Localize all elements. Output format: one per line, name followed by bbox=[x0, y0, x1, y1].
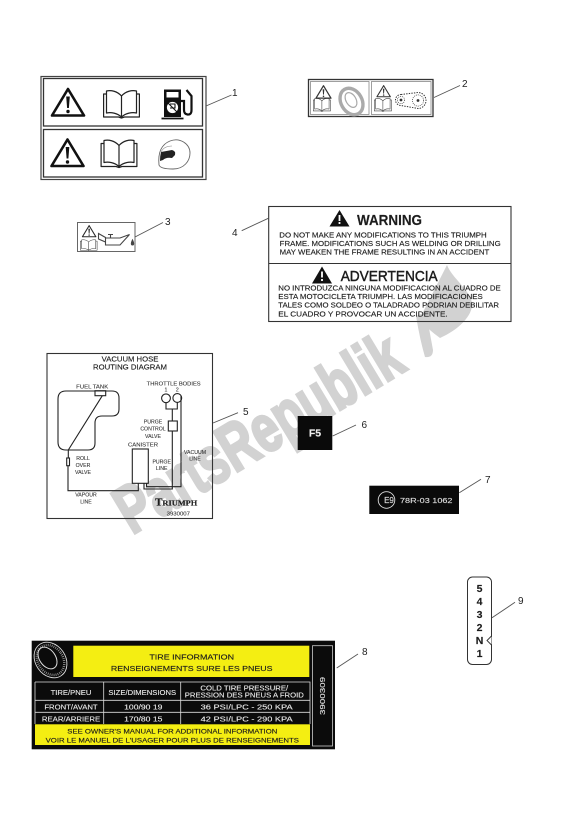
yellow title panel bbox=[73, 646, 309, 677]
diagram labels: CANISTER bbox=[128, 443, 158, 449]
callout 3: 3 bbox=[165, 217, 171, 228]
icon: warning triangle bbox=[377, 86, 390, 97]
advertencia text bbox=[278, 284, 501, 319]
tire pressure table: 170/80 15 bbox=[124, 717, 163, 724]
icon: book top bbox=[104, 91, 139, 118]
icon: warning triangle bottom bbox=[52, 140, 84, 166]
label 1: warning icons panel bbox=[41, 76, 206, 180]
yellow footer panel bbox=[35, 724, 310, 745]
label 9: gear indicator: 1 bbox=[477, 648, 483, 660]
icon: chain and sprockets bbox=[396, 92, 426, 108]
diagram title: ROUTING DIAGRAM bbox=[93, 363, 167, 372]
icon: oil can bbox=[98, 234, 134, 245]
label 8: tire information bbox=[27, 636, 335, 749]
label 7: E9 approval: E9 bbox=[384, 496, 394, 505]
callout 3 bbox=[135, 217, 171, 237]
icon: tire bbox=[335, 84, 368, 119]
tire pressure table: FRONT/AVANT bbox=[44, 704, 98, 711]
icon: book bbox=[80, 240, 97, 251]
warning text bbox=[279, 230, 501, 256]
callout 1: 1 bbox=[232, 88, 238, 99]
icon: warning triangle bbox=[330, 210, 350, 226]
callout 5: 5 bbox=[243, 407, 249, 418]
advertencia text: NO INTRODUZCA NINGUNA MODIFICACION AL CUADRO DE bbox=[278, 284, 501, 293]
part number panel: 3900309 bbox=[318, 677, 327, 715]
diagram labels bbox=[75, 382, 206, 506]
warning text: FRAME. MODIFICATIONS SUCH AS WELDING OR DRILLING bbox=[280, 239, 501, 248]
diagram labels: VALVE bbox=[75, 470, 92, 476]
callout 4: 4 bbox=[232, 228, 238, 239]
icon: book bbox=[313, 98, 330, 111]
diagram labels: VACUUM bbox=[184, 450, 206, 456]
diagram labels: 2 bbox=[176, 388, 179, 394]
icon: warning triangle bbox=[82, 226, 96, 237]
tire pressure table: REAR/ARRIERE bbox=[42, 717, 101, 724]
icon: tire bbox=[27, 636, 74, 684]
callout 9 bbox=[492, 596, 524, 618]
diagram labels: VAPOUR bbox=[75, 493, 97, 499]
warning text: MAY WEAKEN THE FRAME RESULTING IN AN ACCIDENT bbox=[280, 247, 490, 256]
label 7: E9 approval: 78R-03 1062 bbox=[400, 496, 452, 505]
icon: book bottom bbox=[101, 140, 137, 168]
tire pressure table: 36 PSI/LPC - 250 KPA bbox=[201, 704, 293, 711]
tire pressure table: COLD TIRE PRESSURE/ bbox=[200, 685, 288, 692]
diagram labels: PURGE bbox=[152, 459, 171, 465]
diagram labels: VALVE bbox=[145, 434, 162, 440]
tire pressure table: 42 PSI/LPC - 290 KPA bbox=[201, 717, 293, 724]
callout 9: 9 bbox=[518, 596, 524, 607]
advertencia text: TALES COMO SOLDEO O TALADRADO PODRIAN DEBILITAR bbox=[278, 300, 500, 309]
diagram title bbox=[93, 355, 167, 372]
icon: warning triangle top bbox=[52, 89, 84, 116]
tire pressure table bbox=[35, 682, 310, 724]
label 9: gear indicator bbox=[468, 577, 492, 664]
diagram labels: LINE bbox=[156, 466, 168, 472]
logo: triumph: TRIUMPH bbox=[155, 498, 197, 509]
icon: helmet bbox=[159, 140, 190, 169]
callout 2: 2 bbox=[462, 79, 468, 90]
yellow footer panel: VOIR LE MANUEL DE L'USAGER POUR PLUS DE RENSEIGNEMENTS bbox=[46, 737, 299, 744]
diagram labels: LINE bbox=[189, 456, 201, 462]
label 5: vacuum hose routing diagram bbox=[47, 354, 212, 518]
callout 6: 6 bbox=[362, 420, 368, 431]
callout 7 bbox=[459, 475, 491, 493]
part number panel bbox=[312, 646, 332, 746]
callout 1 bbox=[206, 88, 238, 106]
callout 5 bbox=[213, 407, 249, 423]
diagram labels: CONTROL bbox=[140, 426, 166, 432]
icon: warning triangle bbox=[316, 86, 331, 98]
advertencia text: ESTA MOTOCICLETA TRIUMPH. LAS MODIFICACIONES bbox=[278, 292, 483, 301]
callout 8 bbox=[337, 647, 368, 668]
tire pressure table: PRESSION DES PNEUS A FROID bbox=[185, 693, 304, 700]
icon: neutral marker bbox=[487, 636, 492, 645]
callout 7: 7 bbox=[485, 475, 491, 486]
tire pressure table: SIZE/DIMENSIONS bbox=[108, 690, 177, 697]
diagram labels: THROTTLE BODIES bbox=[147, 382, 201, 388]
label 9: gear indicator: 2 bbox=[477, 622, 483, 634]
label 9: gear indicator: 3 bbox=[477, 609, 483, 621]
label 7: E9 approval bbox=[369, 486, 459, 514]
diagram labels: FUEL TANK bbox=[76, 384, 109, 390]
diagram labels: LINE bbox=[80, 500, 92, 506]
diagram labels: 1 bbox=[165, 388, 168, 394]
tire pressure table: TIRE/PNEU bbox=[51, 690, 91, 697]
tire pressure table: 100/90 19 bbox=[124, 704, 163, 711]
label 6: F5 bbox=[298, 416, 332, 450]
diagram labels: OVER bbox=[76, 463, 91, 469]
label 6: F5: F5 bbox=[309, 428, 321, 440]
icon: fuel pump bbox=[162, 90, 192, 118]
heading: warning: WARNING bbox=[357, 213, 422, 229]
label 3: oil icons bbox=[78, 222, 135, 252]
yellow title panel: TIRE INFORMATION bbox=[149, 652, 234, 661]
part number: 3930007 bbox=[167, 512, 190, 518]
heading: advertencia: ADVERTENCIA bbox=[341, 269, 438, 285]
diagram labels: PURGE bbox=[144, 419, 163, 425]
label 9: gear indicator: N bbox=[476, 635, 483, 647]
warning text: DO NOT MAKE ANY MODIFICATIONS TO THIS TRIUMPH bbox=[279, 230, 487, 239]
callout 2 bbox=[434, 79, 468, 98]
hose schematic bbox=[58, 391, 182, 491]
diagram title: VACUUM HOSE bbox=[102, 355, 159, 364]
callout 8: 8 bbox=[362, 647, 368, 658]
label 2: tire and chain icons bbox=[308, 80, 433, 119]
yellow title panel: RENSEIGNEMENTS SURE LES PNEUS bbox=[111, 664, 273, 673]
diagram labels: ROLL bbox=[76, 456, 90, 462]
icon: warning triangle bbox=[312, 266, 332, 284]
icon: book bbox=[374, 98, 391, 111]
label 9: gear indicator: 4 bbox=[477, 596, 483, 608]
label 9: gear indicator: 5 bbox=[477, 583, 483, 595]
watermark: PartsRepublik bbox=[101, 317, 416, 548]
advertencia text: EL CUADRO Y PROVOCAR UN ACCIDENTE. bbox=[278, 310, 448, 319]
callout 6 bbox=[333, 420, 368, 436]
label 4: warning panel bbox=[269, 206, 511, 322]
yellow footer panel: SEE OWNER'S MANUAL FOR ADDITIONAL INFORMATION bbox=[67, 729, 277, 736]
callout 4 bbox=[232, 218, 268, 239]
